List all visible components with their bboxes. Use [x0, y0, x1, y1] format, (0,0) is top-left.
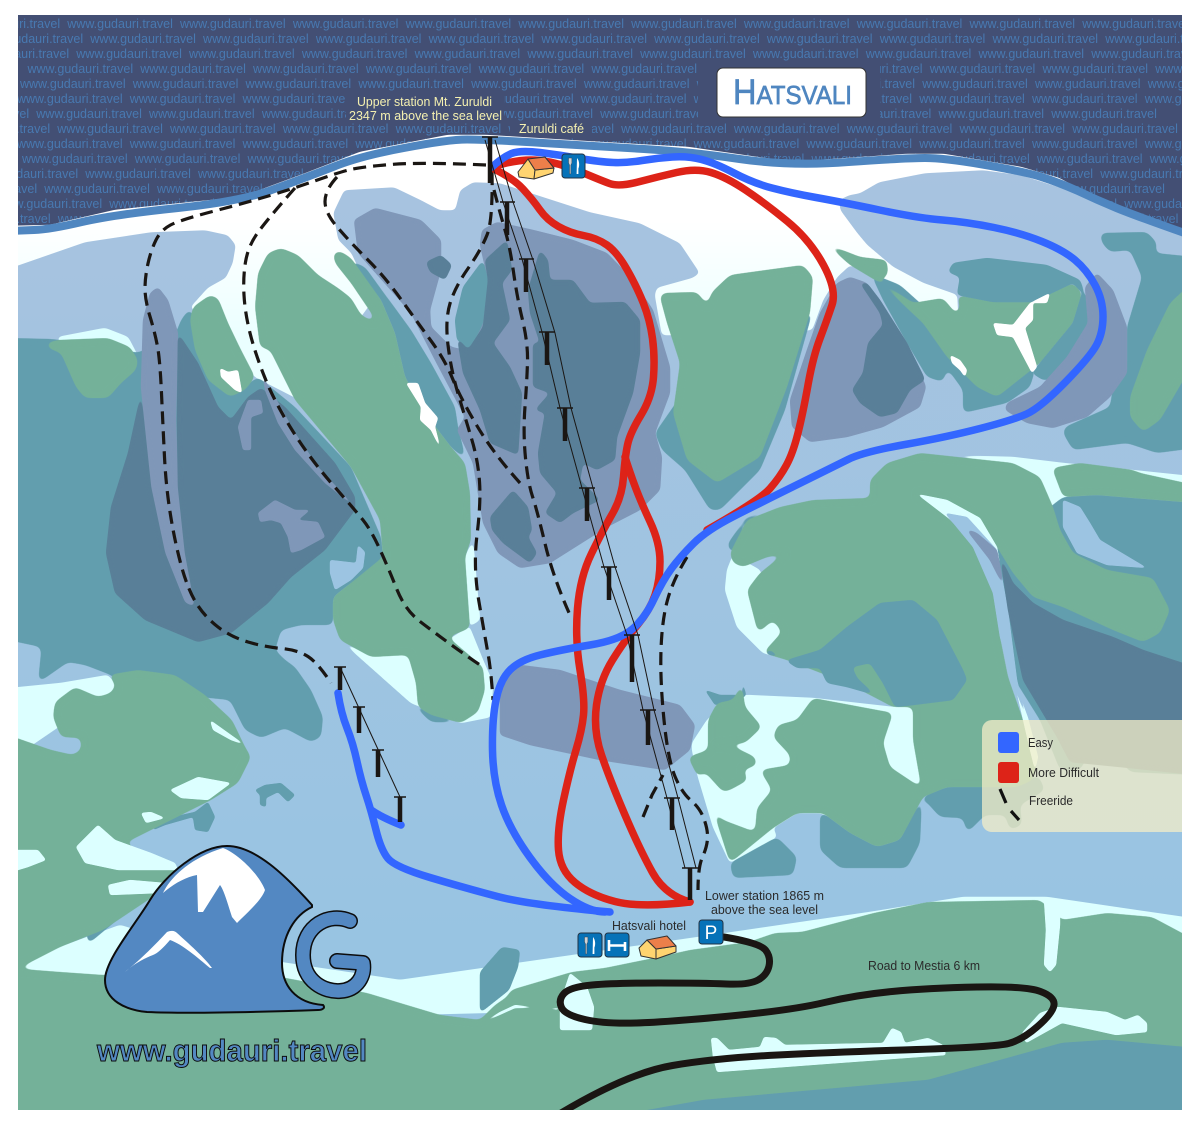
white snow patches — [220, 293, 1050, 450]
icon: bed — [605, 933, 629, 957]
mountain base — [18, 170, 1182, 1020]
watermark text — [0, 17, 1200, 226]
legend text: more difficult: More Difficult — [1028, 766, 1100, 780]
label: upper station: Upper station Mt. Zuruldi — [357, 95, 492, 109]
icon: parking — [699, 920, 723, 944]
icon: restaurant top — [562, 154, 585, 178]
logo website text: www.gudauri.travel — [96, 1033, 367, 1068]
legend text: easy: Easy — [1028, 736, 1054, 750]
legend swatch: more difficult — [998, 762, 1019, 783]
legend swatch: freeride — [1000, 789, 1019, 820]
watermark text: www.gudauri.travel www.gudauri.travel www.gudauri.travel www.gudauri.travel www.gudauri.travel www.gudauri.travel www.gudauri.travel www.gudauri.travel www.gudauri.travel www.gudauri.travel www.gudauri.travel — [0, 32, 1200, 46]
watermark text: www.gudauri.travel www.gudauri.travel www.gudauri.travel www.gudauri.travel www.gudauri.travel www.gudauri.travel www.gudauri.travel www.gudauri.travel www.gudauri.travel www.gudauri.travel www.gudauri.travel — [0, 167, 1200, 181]
icon: Zuruldi cafe house — [518, 157, 554, 179]
grey patches in dark slope — [238, 377, 355, 553]
snow and blue details over forest — [8, 494, 1147, 1072]
blue easy runs — [338, 151, 1103, 912]
snow fields — [10, 135, 1085, 400]
forest areas — [8, 243, 1195, 1125]
label: lower station: above the sea level — [711, 903, 818, 917]
sky background — [18, 15, 1182, 228]
teal lobe in central slope — [455, 260, 488, 350]
grey-blue shaded slopes — [141, 208, 1127, 770]
logo mountain — [105, 846, 324, 1013]
label: lower station — [705, 889, 824, 917]
freeride trails — [145, 163, 708, 890]
light blue details — [330, 500, 1144, 709]
label: upper station: 2347 m above the sea level — [349, 109, 502, 123]
title box: HATSVALI — [733, 73, 852, 112]
small teal patches — [154, 687, 746, 832]
short lower chairlift — [334, 667, 406, 822]
label: road: Road to Mestia 6 km — [868, 959, 980, 973]
mountain ridge line — [10, 140, 1190, 235]
icon: parking: P — [705, 923, 717, 944]
watermark text: www.gudauri.travel www.gudauri.travel www.gudauri.travel www.gudauri.travel www.gudauri.travel www.gudauri.travel www.gudauri.travel www.gudauri.travel www.gudauri.travel www.gudauri.travel www.gudauri.travel — [0, 197, 1200, 211]
icon: hotel house — [639, 936, 676, 959]
logo letter G — [303, 918, 363, 991]
label backing panels — [346, 62, 880, 136]
label: Zuruldi cafe: Zuruldi café — [519, 122, 584, 136]
label: hotel: Hatsvali hotel — [612, 919, 686, 933]
label: upper station — [349, 95, 502, 123]
snow band and patches — [10, 328, 1190, 1015]
logo — [105, 846, 363, 1013]
label: lower station: Lower station 1865 m — [705, 889, 824, 903]
teal slopes under forest — [8, 232, 1195, 945]
logo snow cap — [163, 848, 265, 923]
main chairlift — [482, 137, 698, 900]
road — [560, 937, 1054, 1113]
legend swatch: easy — [998, 732, 1019, 753]
red more difficult runs — [492, 160, 833, 905]
legend text: freeride: Freeride — [1029, 794, 1073, 808]
teal details over forest — [480, 258, 1195, 1125]
dark shaded slopes — [106, 240, 1195, 775]
logo lower snow — [125, 931, 212, 972]
icon: restaurant hotel — [578, 933, 602, 957]
legend — [982, 720, 1182, 832]
title box — [717, 68, 866, 117]
watermark text: www.gudauri.travel www.gudauri.travel www.gudauri.travel www.gudauri.travel www.gudauri.travel www.gudauri.travel www.gudauri.travel www.gudauri.travel www.gudauri.travel www.gudauri.travel www.gudauri.travel — [0, 47, 1197, 61]
